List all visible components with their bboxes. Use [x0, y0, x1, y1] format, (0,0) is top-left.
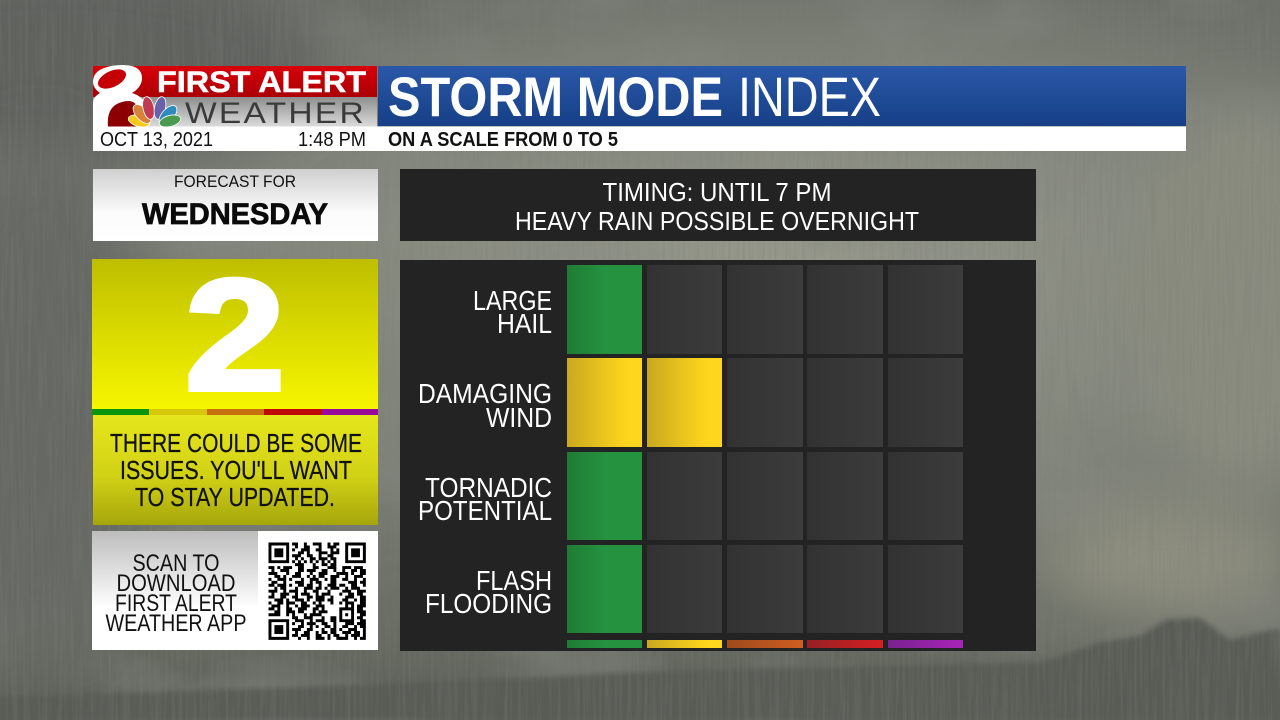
row cells: level 1 — [567, 265, 963, 354]
logo text: FIRST ALERT: FIRST ALERT — [157, 66, 366, 99]
panel: app download — [92, 531, 378, 650]
icon: station number 8 — [93, 65, 148, 127]
score description: ISSUES. YOU'LL WANT — [120, 457, 352, 485]
download text: WEATHER APP — [106, 610, 246, 637]
download text: DOWNLOAD — [116, 570, 236, 597]
logo text: WEATHER: WEATHER — [185, 97, 366, 130]
row cells: level 1 — [567, 452, 963, 540]
row label: FLASH — [476, 565, 552, 596]
panel: forecast day — [93, 169, 378, 241]
scale strip — [92, 409, 378, 415]
row label — [473, 285, 552, 339]
timing line 1: TIMING: UNTIL 7 PM — [602, 177, 832, 207]
forecast label: FORECAST FOR — [174, 172, 296, 191]
logo panel: First Alert Weather — [93, 65, 377, 130]
row label — [418, 472, 552, 526]
QR right-hand modules — [339, 568, 366, 638]
subtitle: ON A SCALE FROM 0 TO 5 — [388, 129, 618, 151]
score description: TO STAY UPDATED. — [135, 484, 335, 512]
day: WEDNESDAY — [142, 198, 328, 231]
download text — [106, 550, 246, 637]
score number: 2 — [185, 248, 285, 424]
score description — [110, 430, 362, 512]
score description: THERE COULD BE SOME — [110, 430, 362, 458]
row: large hail — [473, 265, 963, 354]
QR code — [268, 542, 366, 640]
header bar — [93, 65, 1186, 151]
legend colour strip — [567, 640, 963, 648]
row cells: level 1 — [567, 545, 963, 633]
row cells: level 2 — [567, 358, 963, 447]
panel: hazard chart — [400, 260, 1036, 651]
row label: POTENTIAL — [418, 495, 552, 526]
download text: SCAN TO — [132, 550, 220, 577]
row: damaging wind — [418, 358, 963, 447]
date: OCT 13, 2021 — [100, 129, 213, 151]
date and subtitle strip — [93, 126, 1186, 151]
row: flash flooding — [425, 545, 963, 633]
row: tornadic potential — [418, 452, 963, 540]
row label: DAMAGING — [418, 378, 552, 409]
row label — [418, 378, 552, 433]
row label — [425, 565, 552, 619]
download text: FIRST ALERT — [115, 590, 237, 617]
title band — [378, 65, 1186, 128]
icon: peacock — [127, 96, 182, 129]
title: STORM MODE: STORM MODE — [388, 65, 723, 128]
panel: timing — [400, 169, 1036, 241]
panel: index score — [92, 248, 378, 525]
row label: HAIL — [497, 308, 552, 339]
row label: WIND — [486, 402, 552, 433]
title: INDEX: INDEX — [738, 65, 881, 128]
time: 1:48 PM — [298, 129, 366, 151]
row label: FLOODING — [425, 588, 552, 619]
timing line 2: HEAVY RAIN POSSIBLE OVERNIGHT — [515, 206, 919, 236]
row label: TORNADIC — [425, 472, 552, 503]
row label: LARGE — [473, 285, 552, 316]
